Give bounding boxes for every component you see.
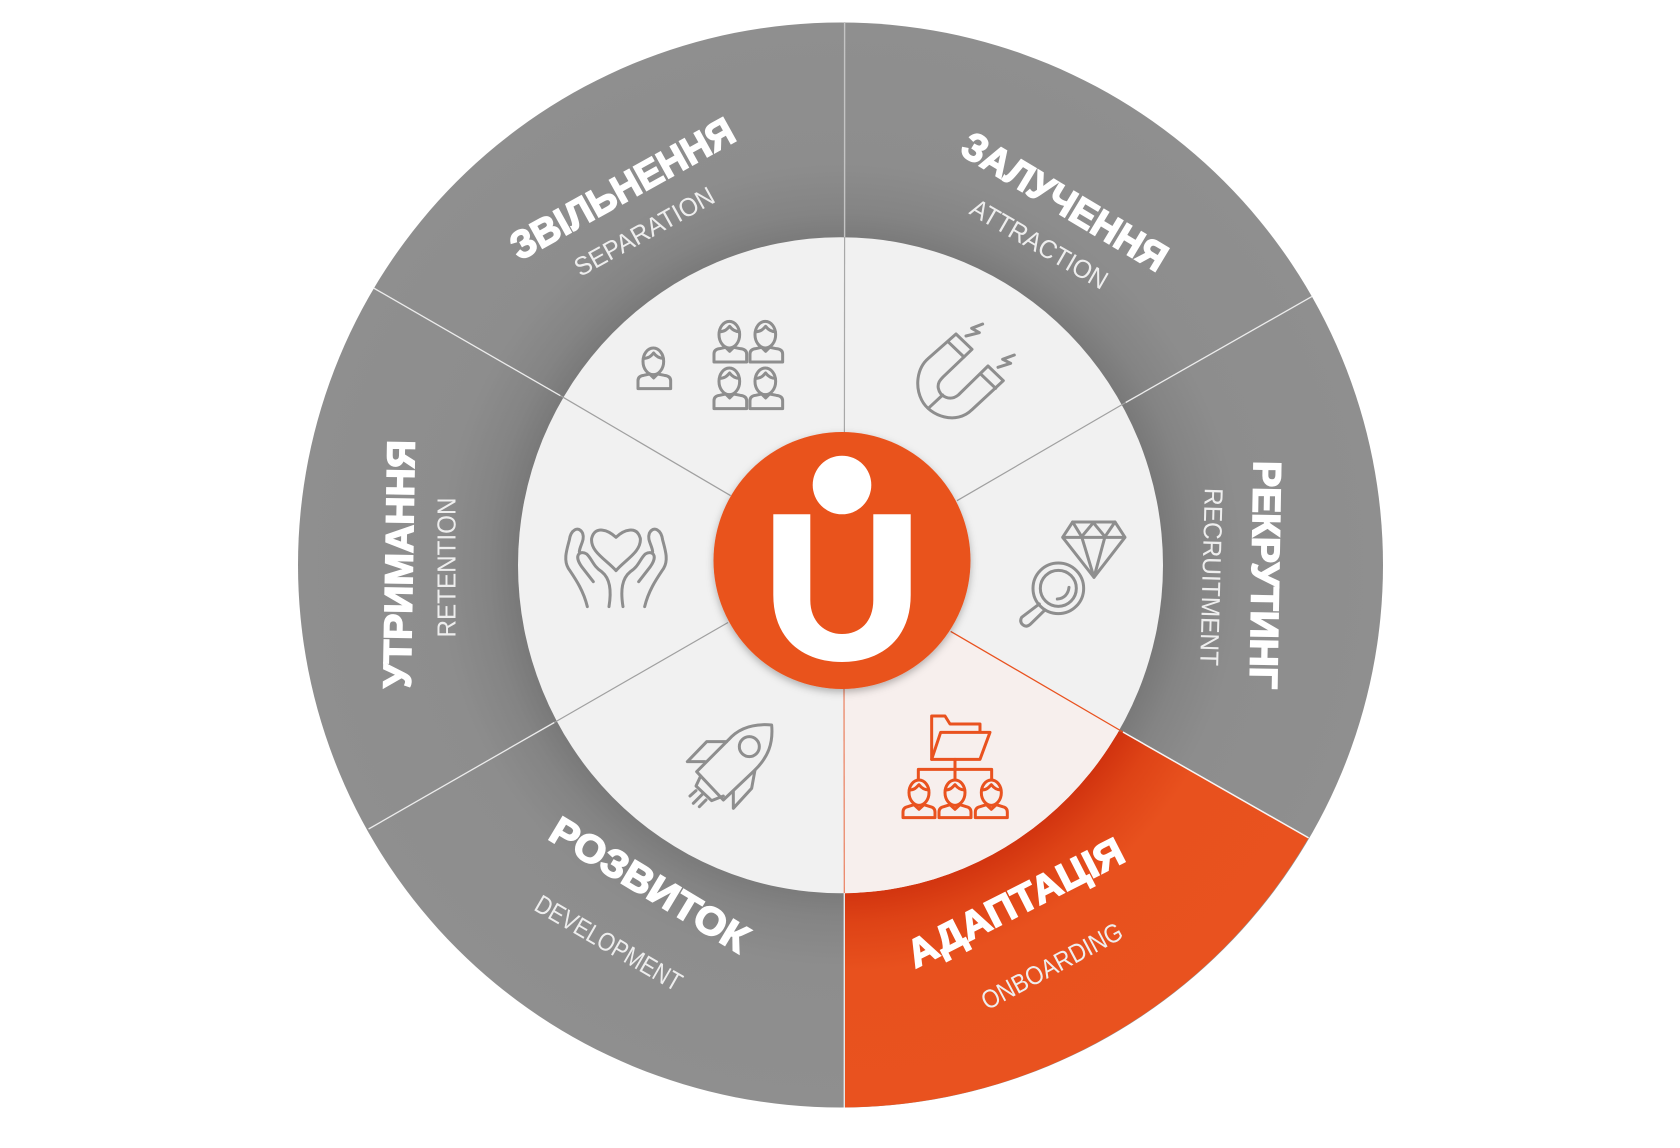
label: onboarding: [900, 830, 1131, 1016]
employee lifecycle wheel: [298, 22, 1383, 1108]
centre logo: [714, 432, 970, 689]
heading: РОЗВИТОК: РОЗВИТОК: [542, 809, 756, 962]
label: recruitment: [1194, 461, 1288, 689]
heading: УТРИМАННЯ: УТРИМАННЯ: [376, 440, 424, 688]
subheading: ONBOARDING: ONBOARDING: [976, 916, 1128, 1016]
subheading: RETENTION: RETENTION: [432, 498, 462, 638]
label: retention: [376, 440, 462, 688]
segment: onboarding inner highlight: [845, 730, 1119, 894]
segment: onboarding ring highlight: [844, 700, 1309, 1108]
subheading: DEVELOPMENT: DEVELOPMENT: [530, 889, 688, 997]
icon: rocket: [687, 725, 772, 808]
subheading: RECRUITMENT: RECRUITMENT: [1194, 488, 1229, 666]
subheading: SEPARATION: SEPARATION: [569, 181, 720, 282]
label: development: [530, 809, 756, 997]
icon: hands holding heart: [566, 529, 666, 607]
icon: magnet: [918, 324, 1014, 418]
label: attraction: [954, 124, 1175, 295]
heading: РЕКРУТИНГ: РЕКРУТИНГ: [1241, 461, 1288, 689]
heading: ЗВІЛЬНЕННЯ: ЗВІЛЬНЕННЯ: [503, 110, 742, 269]
outer ring: [298, 22, 1383, 1108]
heading: АДАПТАЦІЯ: АДАПТАЦІЯ: [900, 830, 1131, 977]
label: separation: [503, 110, 742, 282]
icon: folder and team hierarchy: [903, 716, 1007, 818]
subheading: ATTRACTION: ATTRACTION: [965, 192, 1113, 295]
inner disc: [518, 237, 1163, 893]
icon: diamond and magnifier: [1021, 522, 1125, 626]
icon: one person and a team of four: [638, 321, 783, 409]
heading: ЗАЛУЧЕННЯ: ЗАЛУЧЕННЯ: [954, 124, 1175, 280]
